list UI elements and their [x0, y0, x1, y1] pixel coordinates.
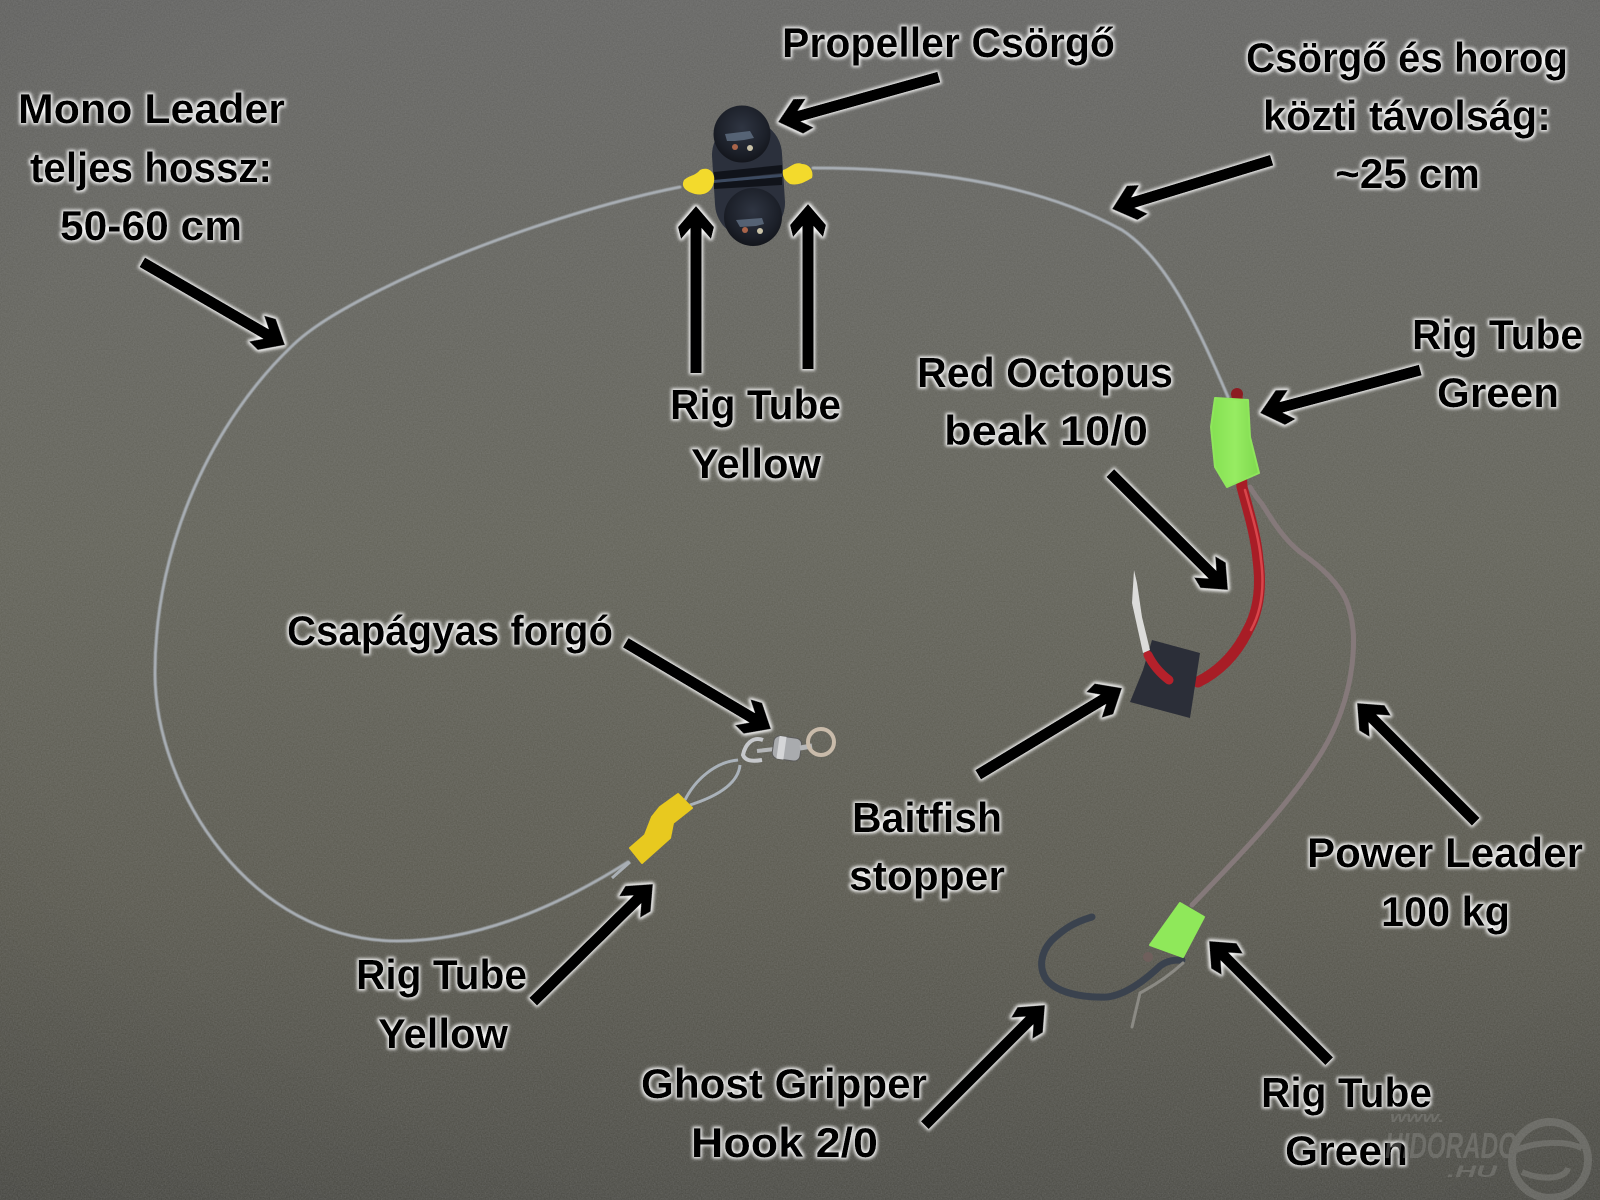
yellow rig tube left of rattle [683, 169, 714, 194]
label: distance: Csörgő és horog [1246, 34, 1568, 81]
watermark: HIDORADO [1385, 1125, 1517, 1166]
arrow: distance [1107, 143, 1277, 226]
arrow: power leader [1344, 690, 1489, 835]
label: Mono Leader: teljes hossz: [30, 144, 272, 191]
label: Rig Tube Green upper: Rig Tube [1412, 311, 1583, 358]
label: Rig Tube Yellow top [670, 381, 841, 487]
label: Rig Tube Green upper [1412, 311, 1583, 416]
arrow: yellow tube lower [521, 871, 666, 1015]
watermark [1385, 1109, 1588, 1198]
arrow: baitfish stopper [969, 673, 1131, 790]
label: Power Leader [1307, 829, 1583, 935]
label: Red Octopus [917, 349, 1173, 454]
label: Rig Tube Green lower [1261, 1069, 1432, 1174]
label: distance [1246, 34, 1568, 197]
ghost gripper hook [1042, 917, 1183, 1027]
label: Rig Tube Green lower: Green [1285, 1127, 1408, 1174]
label: distance: közti távolság: [1263, 92, 1551, 139]
yellow rig tube right of rattle [783, 163, 813, 184]
label: Mono Leader: Mono Leader [18, 85, 285, 132]
label: Rig Tube Green upper: Green [1437, 369, 1559, 416]
red octopus hook [1130, 388, 1263, 718]
label: Red Octopus: Red Octopus [917, 349, 1173, 396]
arrow: green tube upper [1255, 353, 1425, 430]
label: Mono Leader: 50-60 cm [60, 202, 242, 249]
label: Rig Tube Yellow lower: Rig Tube [356, 951, 527, 998]
label: Mono Leader [18, 85, 285, 249]
label: Red Octopus: beak 10/0 [944, 407, 1148, 454]
label: Rig Tube Yellow top: Yellow [691, 440, 821, 487]
arrow: green tube lower [1196, 928, 1342, 1074]
label: Baitfish stopper: Baitfish [852, 794, 1002, 841]
label: Rig Tube Yellow lower [356, 951, 527, 1057]
mono leader line [155, 168, 1228, 941]
label: Rig Tube Yellow top: Rig Tube [670, 381, 841, 428]
label: Power Leader: Power Leader [1307, 829, 1583, 876]
label: Power Leader: 100 kg [1381, 888, 1510, 935]
propeller rattle [714, 106, 782, 246]
arrow: ghost gripper [912, 992, 1058, 1138]
label: Rig Tube Yellow lower: Yellow [378, 1010, 508, 1057]
green rig tube upper [1211, 398, 1259, 487]
arrow: red octopus [1098, 460, 1241, 603]
green rig tube lower [1150, 903, 1204, 957]
arrow: yellow tube left [678, 206, 714, 373]
yellow rig tube lower [630, 794, 692, 863]
label: Rig Tube Green lower: Rig Tube [1261, 1069, 1432, 1116]
label: Baitfish stopper: stopper [849, 852, 1005, 899]
arrow: swivel [616, 627, 780, 744]
label: distance: ~25 cm [1335, 150, 1480, 197]
label: Csapágyas forgó: Csapágyas forgó [287, 607, 613, 654]
loop and swivel [612, 729, 834, 878]
hook silver point [1132, 570, 1150, 653]
arrow: yellow tube right [790, 204, 826, 369]
baitfish stopper [1130, 640, 1200, 718]
label: Ghost Gripper: Hook 2/0 [691, 1119, 878, 1166]
label: Baitfish stopper [849, 794, 1005, 899]
watermark: .HU [1447, 1162, 1498, 1181]
label: Ghost Gripper [641, 1060, 927, 1166]
power leader line [1192, 487, 1354, 905]
arrow: propeller [773, 60, 944, 139]
watermark: www. [1390, 1109, 1444, 1126]
arrow: mono leader [133, 247, 294, 361]
label: Ghost Gripper: Ghost Gripper [641, 1060, 927, 1107]
label: Propeller Csörgő: Propeller Csörgő [782, 19, 1115, 66]
